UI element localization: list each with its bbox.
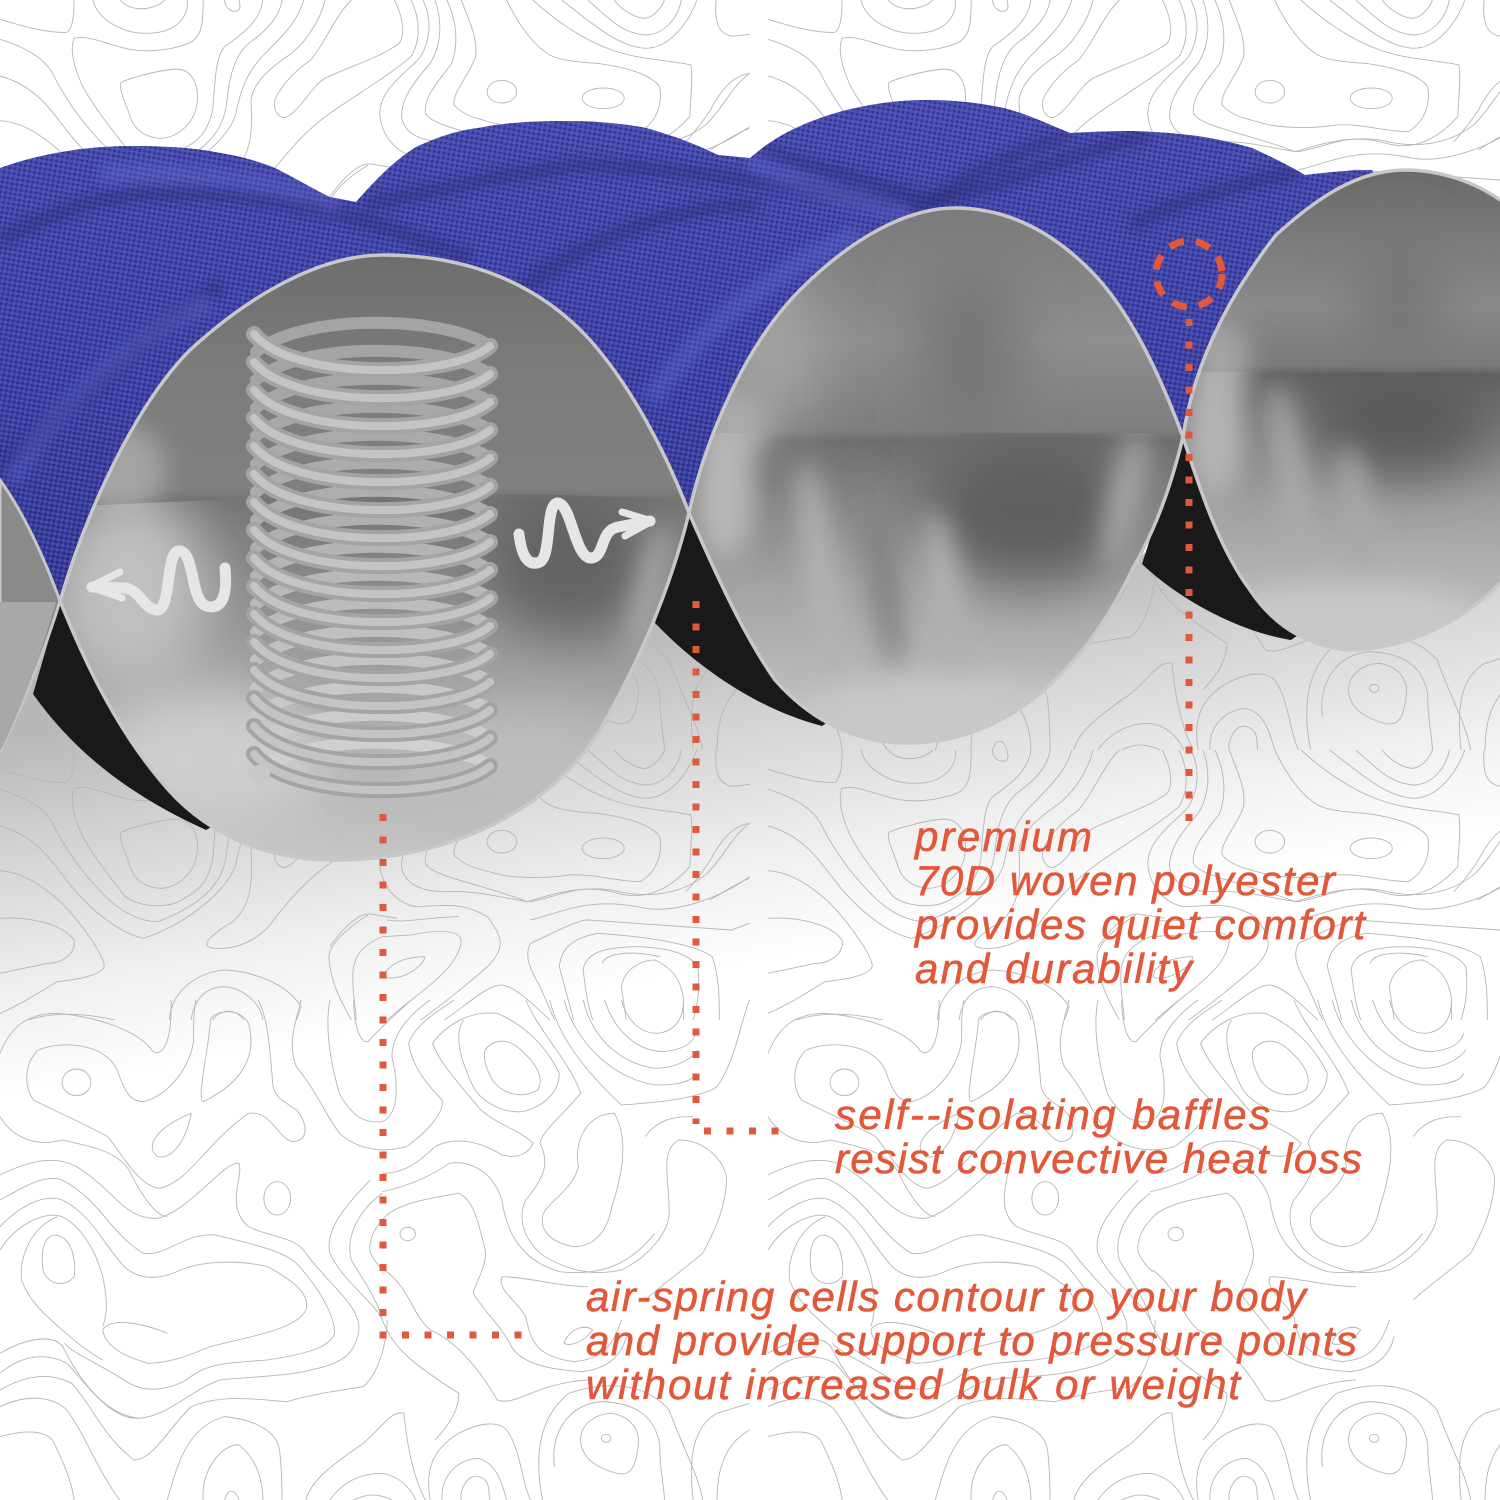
text: baffles: resist convective heat loss: [835, 1135, 1362, 1182]
callout: air-spring leader line: [383, 814, 525, 1335]
text: premium fabric: 70D woven polyester: [915, 857, 1337, 904]
cross-section: cell 1: [58, 253, 690, 862]
black underside wedges: [33, 437, 1320, 830]
callout: baffles leader line: [696, 601, 790, 1131]
cross-section: cell 2: [680, 200, 1200, 760]
text: air-spring cells: air-spring cells contour to your body: [586, 1273, 1309, 1320]
callout: fabric leader line: [1186, 319, 1192, 822]
fabric seams: [0, 135, 1300, 470]
heat arrow right: [519, 503, 652, 563]
cross-section: cell 3: [1175, 165, 1500, 655]
text: air-spring cells: without increased bulk or weight: [586, 1361, 1242, 1408]
air spring coil: [248, 323, 490, 790]
text: air-spring cells: and provide support to pressure points: [586, 1317, 1357, 1364]
air mattress illustration: [0, 100, 1500, 880]
cross-section: left edge cell: [0, 480, 60, 752]
text: premium fabric: provides quiet comfort: [913, 901, 1367, 948]
heat arrow left: [90, 551, 226, 610]
text: premium fabric: and durability: [915, 945, 1195, 992]
text: premium fabric: premium: [913, 813, 1092, 860]
callout: fabric dashed circle: [1156, 241, 1222, 307]
blue fabric top: [0, 100, 1374, 596]
ground shadow: [0, 540, 1500, 1500]
text: baffles: self--isolating baffles: [835, 1091, 1270, 1138]
